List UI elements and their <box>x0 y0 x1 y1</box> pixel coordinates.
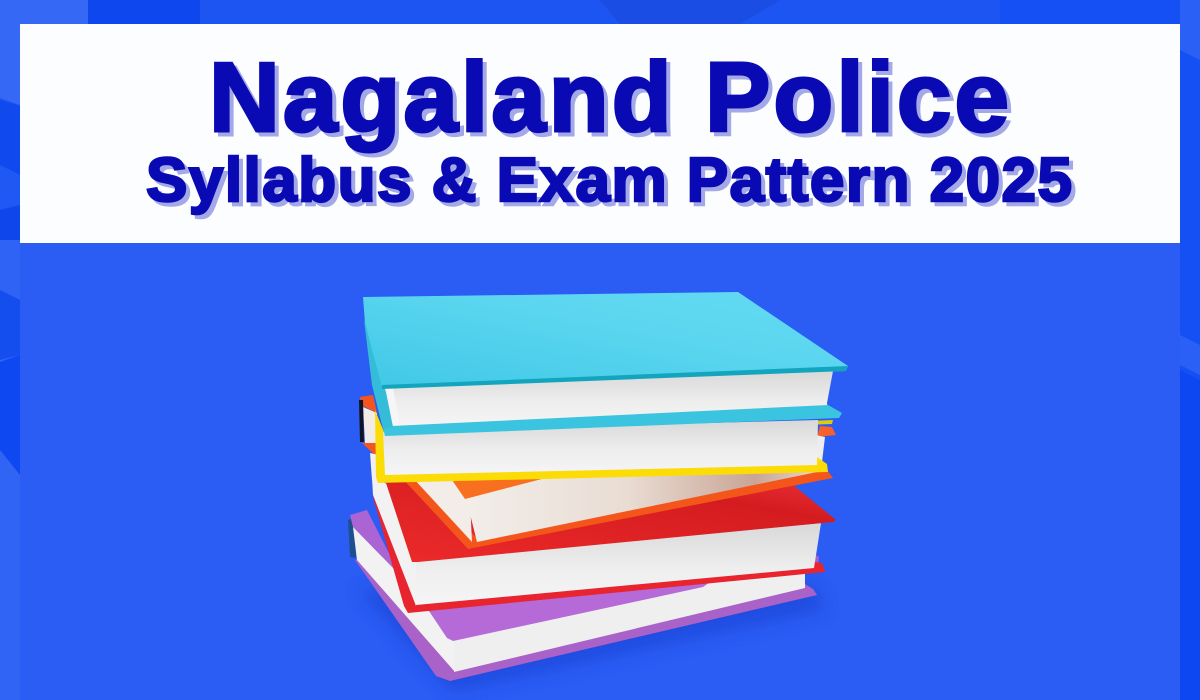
bottom cover <box>383 405 842 436</box>
front pages <box>384 371 833 428</box>
book: yellow <box>359 395 836 486</box>
front pages <box>454 565 805 672</box>
front pages <box>416 523 821 605</box>
heading: Nagaland Police: Nagaland Police <box>213 46 1013 156</box>
book shadow <box>358 585 825 692</box>
purple top cover, left part <box>350 510 400 575</box>
cover edge <box>382 366 848 389</box>
red bottom cover <box>373 497 825 613</box>
top yellow strip right <box>707 420 833 428</box>
subheading: Syllabus & Exam Pattern 2025: Syllabus & Exam Pattern 2025 <box>146 146 1072 215</box>
book: purple (bottom) <box>348 510 819 681</box>
orange top cover <box>452 476 553 499</box>
white spine <box>353 527 455 672</box>
spine <box>372 478 422 606</box>
left orange and white behind <box>360 395 377 413</box>
illustration: stack of books <box>348 292 848 692</box>
heading: Nagaland Police: Nagaland Police <box>209 42 1009 152</box>
front pages <box>383 420 818 475</box>
blue inner panel <box>20 243 1180 700</box>
book: red <box>372 478 836 613</box>
subheading: Syllabus & Exam Pattern 2025: Syllabus & Exam Pattern 2025 <box>150 150 1076 219</box>
red top cover <box>385 480 836 562</box>
title banner <box>20 24 1180 243</box>
spine <box>364 320 393 429</box>
purple back cover <box>355 558 817 681</box>
front pages <box>466 470 827 542</box>
orange bottom cover <box>402 470 833 549</box>
yellow cover <box>375 410 828 483</box>
book: cyan (top) <box>363 292 848 436</box>
book: orange <box>402 470 833 549</box>
dark headband <box>348 518 356 558</box>
top cover <box>363 292 848 387</box>
right orange corner and pages behind <box>817 426 836 437</box>
left pages <box>413 478 472 542</box>
purple top cover, front part <box>425 575 720 641</box>
